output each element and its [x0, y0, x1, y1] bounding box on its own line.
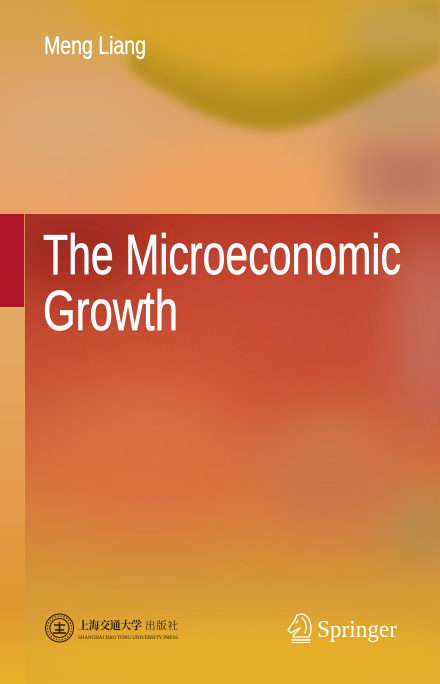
publisher press characters: 出版社: [145, 619, 178, 632]
red accent block: [0, 214, 24, 307]
publisher logo: Springer: [288, 614, 397, 643]
icon: university seal: [46, 614, 74, 642]
panel: left strip: [0, 307, 25, 684]
publisher English name: SHANGHAI JIAO TONG UNIVERSITY PRESS: [78, 636, 178, 641]
panel: main red-to-gold field: [0, 205, 440, 684]
panel: top band background: [0, 0, 440, 220]
icon: Springer knight: [288, 614, 311, 642]
publisher logo: Shanghai Jiao Tong University Press: [46, 614, 178, 642]
publisher Chinese name: 上海交通大学: [78, 618, 142, 632]
author name: Meng Liang: [44, 32, 146, 60]
title: Growth: [43, 279, 178, 343]
Springer wordmark: Springer: [317, 617, 397, 643]
title: [43, 223, 401, 343]
